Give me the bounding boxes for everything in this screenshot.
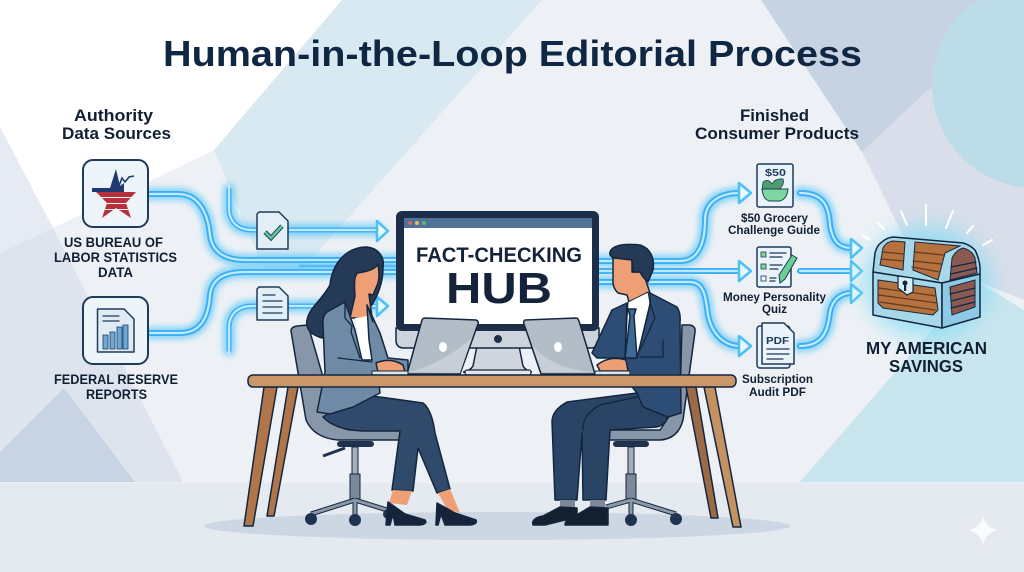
man's laptop: [524, 318, 630, 375]
flow: federal reserve to hub: [150, 272, 400, 333]
heading: finished consumer products: [695, 106, 859, 143]
icon: text document: [257, 287, 288, 320]
arrow: hub to grocery guide: [600, 183, 751, 261]
front: [873, 272, 942, 328]
label: federal reserve reports: FEDERAL RESERVE: [54, 372, 178, 387]
title: Human-in-the-Loop Editorial Process: [163, 33, 862, 74]
neck and face: [350, 264, 379, 318]
label: subscription audit pdf: Subscription: [742, 372, 813, 386]
hub label: [416, 244, 582, 313]
heading: finished consumer products: Consumer Products: [695, 124, 859, 143]
icon: money personality quiz: [757, 247, 797, 287]
label: my american savings: MY AMERICAN: [866, 338, 987, 358]
rays: [862, 205, 992, 245]
chest glow: [863, 226, 991, 338]
ankles: [389, 489, 460, 513]
hub label: HUB: [446, 264, 552, 313]
label: subscription audit pdf: Audit PDF: [749, 385, 806, 399]
legs: [323, 394, 450, 493]
shoes: [533, 507, 577, 525]
lid: [873, 237, 980, 283]
tie: [625, 309, 637, 358]
heading: authority data sources: [62, 106, 171, 143]
side: [942, 274, 980, 328]
heading: finished consumer products: Finished: [740, 106, 809, 125]
icon: grocery guide: $50: [765, 168, 787, 179]
icon: checked document: [257, 212, 288, 249]
label: us bureau of labor statistics data: [54, 235, 177, 280]
hair: [307, 247, 383, 338]
lock: [898, 276, 913, 295]
label: subscription audit pdf: [742, 372, 813, 399]
label: federal reserve reports: REPORTS: [86, 387, 147, 402]
icon: grocery guide: [757, 164, 793, 207]
shirt: [355, 316, 373, 360]
arrow: grocery guide to chest: [800, 193, 862, 258]
icon: federal reserve report: [83, 297, 148, 364]
woman's chair: [291, 325, 400, 526]
label: my american savings: SAVINGS: [889, 356, 963, 376]
arrow: hub to subscription audit: [600, 282, 751, 356]
label: us bureau of labor statistics data: DATA: [98, 265, 133, 280]
heading: authority data sources: Authority: [74, 106, 154, 125]
monitor: [396, 211, 599, 375]
socks: [560, 500, 575, 509]
label: us bureau of labor statistics data: US BUREAU OF: [64, 235, 163, 250]
icon: sparkle: [968, 515, 998, 546]
neck and face: [613, 258, 650, 305]
man: [533, 244, 681, 525]
label: federal reserve reports: [54, 372, 178, 402]
icon: subscription audit pdf: [757, 323, 794, 368]
label: money personality quiz: Quiz: [762, 302, 787, 316]
jacket: [317, 302, 408, 414]
hand: [376, 360, 405, 372]
label: grocery challenge guide: $50 Grocery: [741, 211, 808, 225]
label: grocery challenge guide: [728, 211, 820, 237]
icon: subscription audit pdf: PDF: [766, 336, 789, 347]
icon: treasure chest: [862, 205, 992, 338]
desk: [244, 375, 741, 527]
label: money personality quiz: Money Personality: [723, 290, 826, 304]
shirt: [625, 292, 650, 358]
woman's laptop: [372, 318, 478, 375]
legs: [552, 393, 667, 500]
label: money personality quiz: [723, 290, 826, 316]
arrow: text document to hub: [229, 297, 388, 354]
flow: center line to hub: [300, 265, 400, 267]
heading: authority data sources: Data Sources: [62, 124, 171, 143]
label: us bureau of labor statistics data: LABOR STATISTICS: [54, 250, 177, 265]
icon: bureau of labor statistics star: [83, 160, 148, 227]
arrow: audit to chest: [800, 284, 862, 346]
label: grocery challenge guide: Challenge Guide: [728, 223, 820, 237]
label: my american savings: [866, 338, 987, 376]
hand: [597, 358, 628, 371]
woman: [307, 247, 476, 525]
jacket: [592, 293, 681, 417]
arrow: hub to personality quiz: [600, 261, 751, 281]
arrow: verified document to hub: [229, 186, 388, 241]
hair: [610, 244, 653, 282]
man's chair: [577, 325, 695, 526]
shoes: [386, 502, 426, 525]
arrow: quiz to chest: [800, 261, 862, 281]
flow: bureau of labor statistics to hub: [150, 194, 400, 260]
hub label: FACT-CHECKING: [416, 244, 582, 267]
